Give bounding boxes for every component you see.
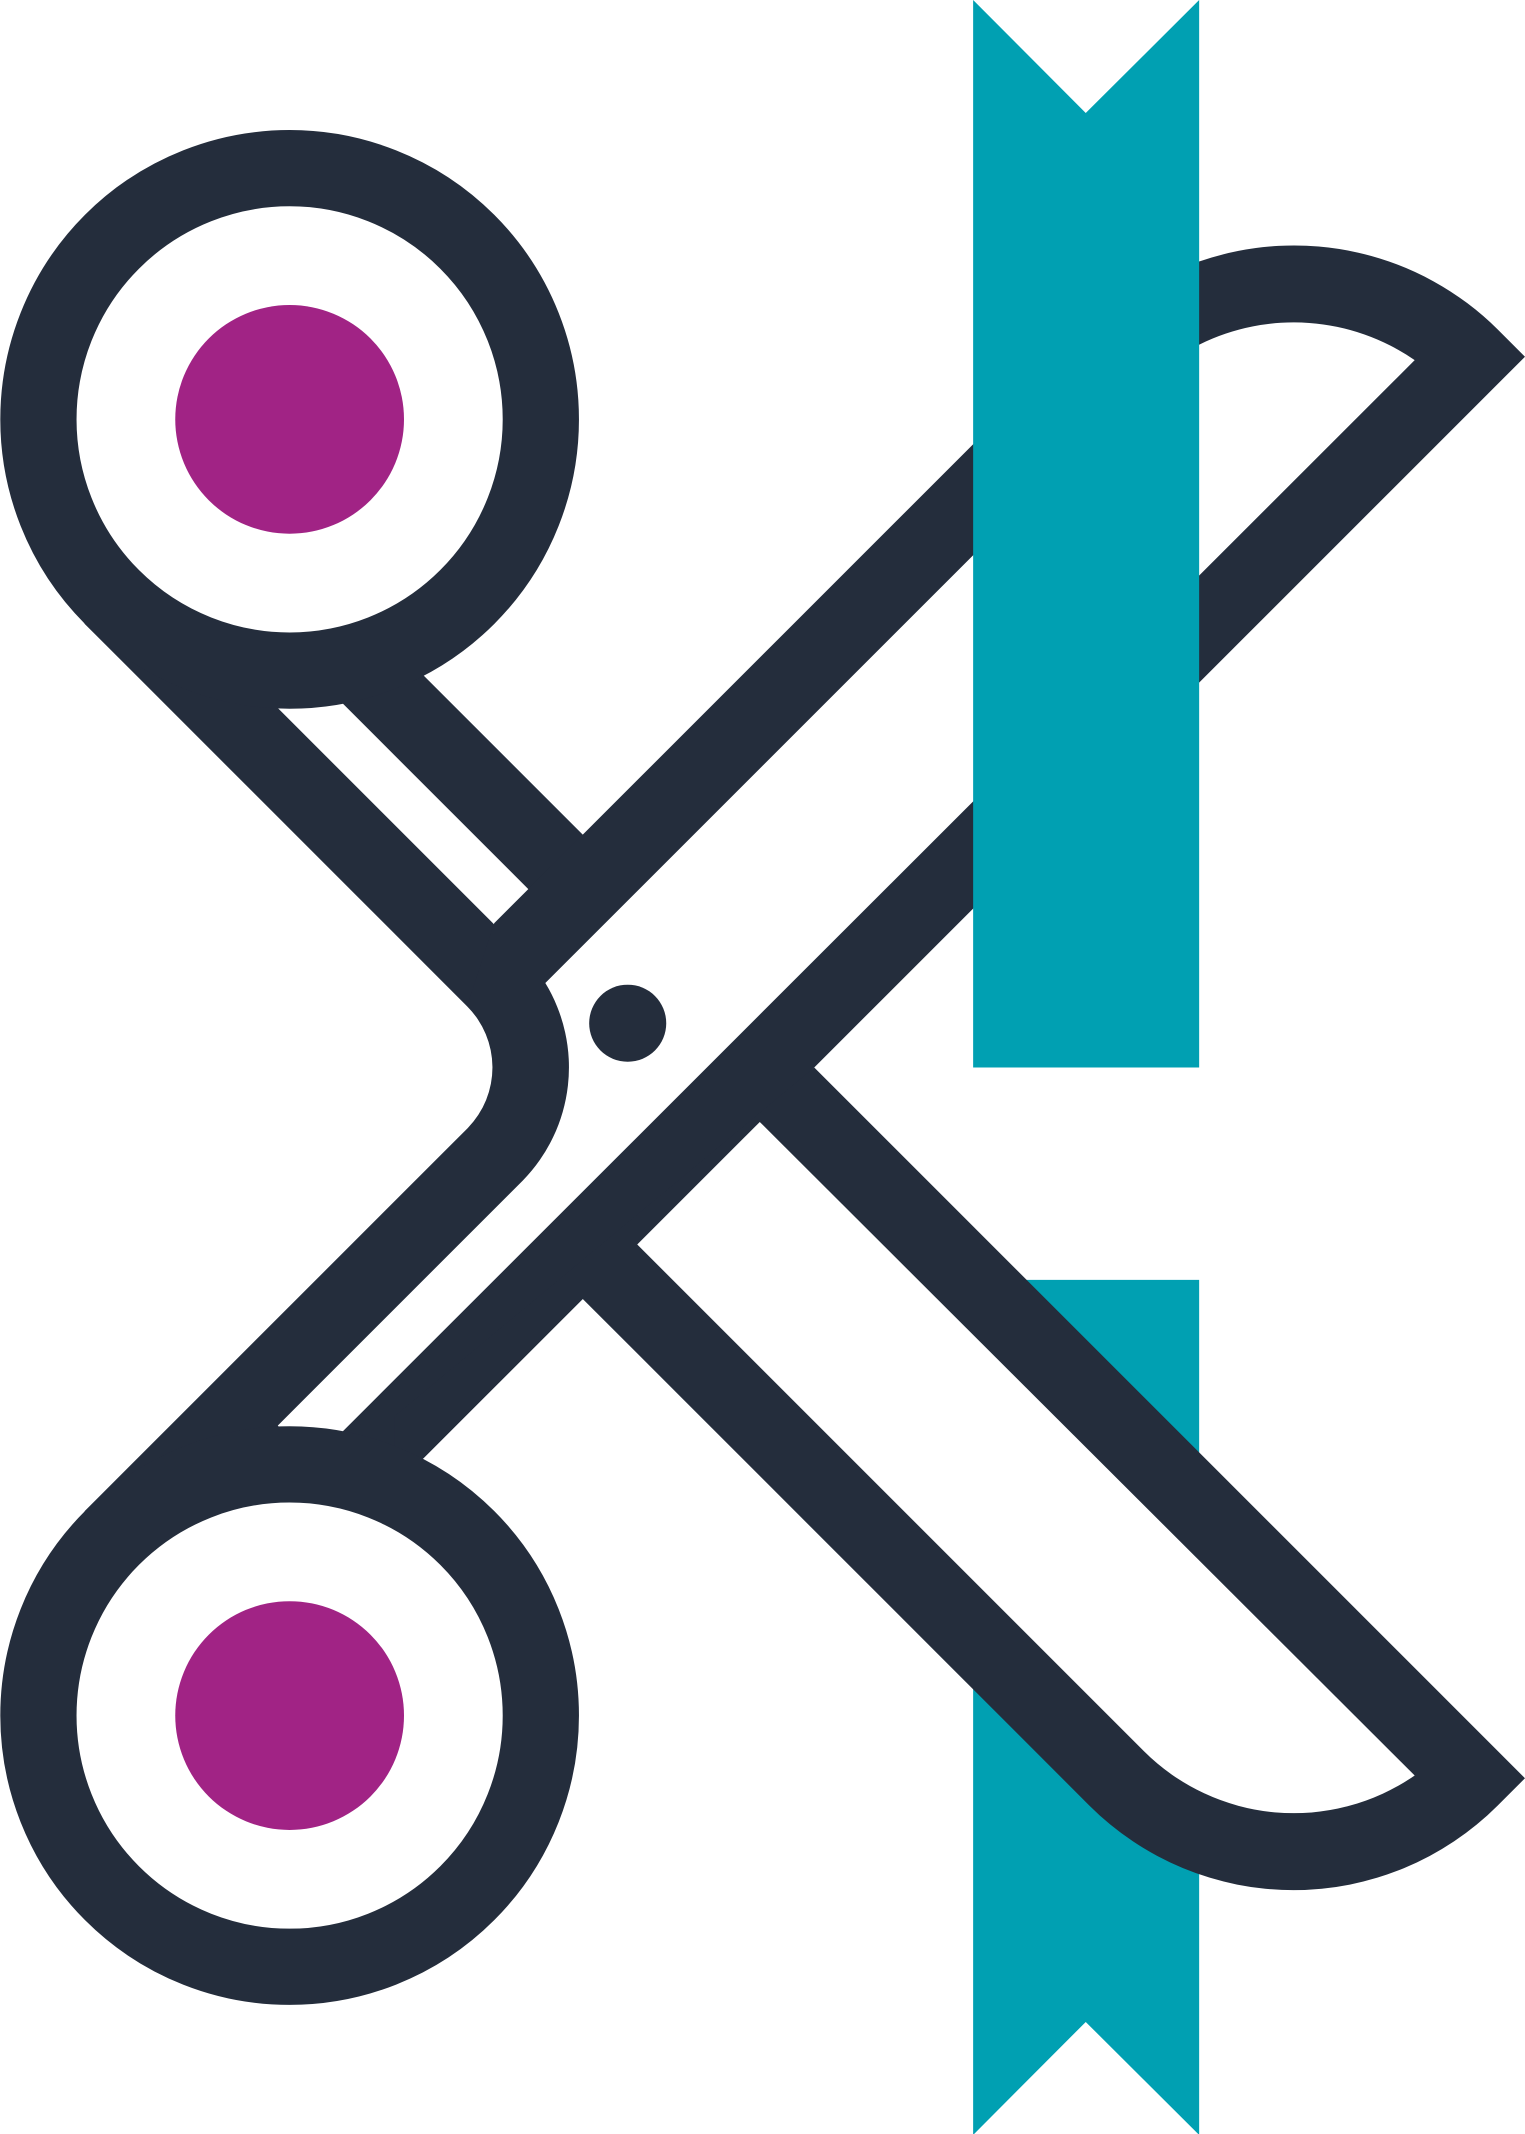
lower ring magenta centre bbox=[175, 1601, 404, 1830]
upper finger ring bbox=[38, 168, 541, 671]
ribbon: teal lower section bbox=[973, 1280, 1199, 2134]
lower finger ring bbox=[38, 1464, 541, 1967]
blade: lower blade bbox=[395, 1067, 1525, 1890]
pivot dot bbox=[589, 985, 666, 1062]
ribbon: teal upper section bbox=[973, 0, 1199, 1067]
handle band: upper handle to pivot bbox=[84, 545, 599, 1006]
upper ring magenta centre bbox=[175, 305, 404, 534]
blade: upper blade with lower handle arm bbox=[84, 245, 1525, 1525]
